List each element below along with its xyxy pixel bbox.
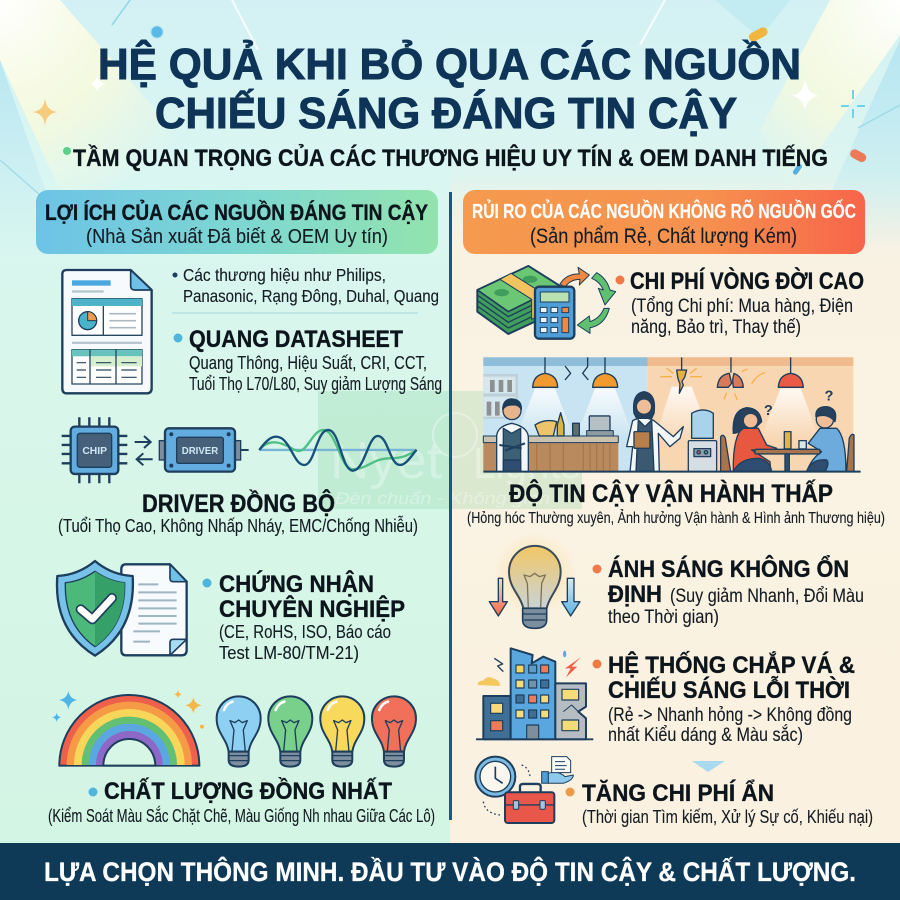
illustration: restaurant with failing lights: [483, 357, 861, 472]
text block: brands: Panasonic, Rạng Đông, Duhal, Quang: [183, 286, 439, 306]
text block: certification: Test LM-80/TM-21): [219, 643, 359, 663]
text block: quang datasheet: Quang Thông, Hiệu Suất, CRI, CCT,: [189, 353, 427, 373]
icon: money calculator and cycle arrows: [477, 266, 616, 339]
bartender: [497, 399, 528, 472]
icon: chip driver and wave: [62, 417, 417, 483]
text block: hidden costs: [566, 779, 873, 827]
text block: high lifecycle cost: CHI PHÍ VÒNG ĐỜI CAO: [630, 267, 864, 295]
text block: unstable light: [592, 555, 864, 628]
watermark: Nyet: [330, 432, 443, 490]
text block: consistent quality: (Kiểm Soát Màu Sắc Chặt Chẽ, Màu Giống Nh nhau Giữa Các Lô): [48, 805, 435, 826]
text block: consistent quality: CHẤT LƯỢNG ĐỒNG NHẤT: [104, 777, 392, 805]
text block: unstable light: (Suy giảm Nhanh, Đổi Màu: [670, 586, 864, 607]
text block: certification: CHUYÊN NGHIỆP: [219, 595, 405, 623]
text block: quang datasheet: QUANG DATASHEET: [189, 326, 403, 353]
icon: rainbow: [52, 690, 204, 766]
question marks: ?: [764, 403, 773, 419]
text block: certification: [202, 570, 405, 663]
panel: benefits header: (Nhà Sản xuất Đã biết & OEM Uy tín): [86, 226, 388, 248]
icon: chip driver and wave: DRIVER: [182, 446, 218, 457]
icon: four coloured bulbs: [217, 696, 416, 767]
text block: certification: CHỨNG NHẬN: [219, 570, 374, 598]
icon: chip driver and wave: CHIP: [82, 446, 107, 457]
text block: synchronized driver: (Tuổi Thọ Cao, Không Nhấp Nháy, EMC/Chống Nhiễu): [58, 515, 418, 536]
text block: low operational reliability: ĐỘ TIN CẬY VẬN HÀNH THẤP: [509, 478, 833, 508]
text block: synchronized driver: DRIVER ĐỒNG BỘ: [142, 488, 335, 518]
text block: brands: [172, 265, 439, 313]
water cooler: [688, 410, 717, 472]
text block: patchwork system: HỆ THỐNG CHẮP VÁ &: [608, 651, 855, 679]
text block: quang datasheet: [174, 326, 442, 394]
text block: certification: (CE, RoHS, ISO, Báo cáo: [219, 622, 391, 642]
text block: high lifecycle cost: [616, 267, 864, 338]
icon: shield and certificate: [57, 561, 187, 656]
counter: [483, 413, 618, 472]
text block: patchwork system: (Rẻ -> Nhanh hỏng -> Không đồng: [608, 705, 852, 726]
text block: patchwork system: nhất Kiểu dáng & Màu sắc): [608, 724, 803, 746]
text block: consistent quality: [48, 777, 435, 826]
title: [98, 38, 801, 138]
icon: datasheet document: [62, 270, 152, 393]
arrow: down triangle: [692, 761, 725, 772]
watermark: Đèn chuẩn - Không gian: [335, 489, 550, 508]
text block: quang datasheet: Tuổi Thọ L70/L80, Suy giảm Lượng Sáng: [189, 374, 442, 394]
watermark: [318, 391, 582, 509]
waitress: [627, 392, 683, 472]
text block: synchronized driver: [58, 488, 418, 536]
icon: patched buildings: [476, 648, 593, 739]
title: CHIẾU SÁNG ĐÁNG TIN CẬY: [155, 88, 737, 138]
text block: high lifecycle cost: năng, Bảo trì, Thay thế): [631, 317, 801, 338]
icon: dimming bulb with down arrows: [489, 533, 580, 628]
text block: patchwork system: [592, 651, 855, 746]
panel: risks header: [463, 190, 865, 254]
decorative sparkles and pills: [32, 26, 868, 176]
panel: benefits header: [36, 190, 438, 254]
text block: hidden costs: TĂNG CHI PHÍ ẨN: [582, 779, 774, 807]
text block: unstable light: ĐỊNH: [608, 581, 662, 608]
scene background: [483, 357, 853, 472]
text block: patchwork system: CHIẾU SÁNG LỖI THỜI: [608, 675, 850, 704]
text block: unstable light: theo Thời gian): [608, 607, 719, 628]
footer banner: [0, 843, 900, 900]
text block: brands: Các thương hiệu như Philips,: [183, 265, 386, 285]
lamps: [533, 357, 803, 400]
customers at table: [721, 407, 854, 472]
back shelf: [483, 374, 518, 419]
watermark: Lights: [473, 439, 581, 488]
center divider: [449, 192, 452, 820]
illustration: restaurant with failing lights: ?: [824, 389, 833, 405]
panel: benefits header: LỢI ÍCH CỦA CÁC NGUỒN ĐÁNG TIN CẬY: [45, 200, 428, 225]
title: HỆ QUẢ KHI BỎ QUA CÁC NGUỒN: [98, 38, 801, 89]
icon: clock toolbox and hand: [475, 757, 573, 823]
text block: unstable light: ÁNH SÁNG KHÔNG ỔN: [608, 555, 849, 583]
panel: risks header: (Sản phẩm Rẻ, Chất lượng Kém): [530, 225, 797, 248]
text block: low operational reliability: [467, 478, 885, 527]
text block: high lifecycle cost: (Tổng Chi phí: Mua hàng, Điện: [631, 296, 853, 317]
light cones: [515, 387, 820, 443]
